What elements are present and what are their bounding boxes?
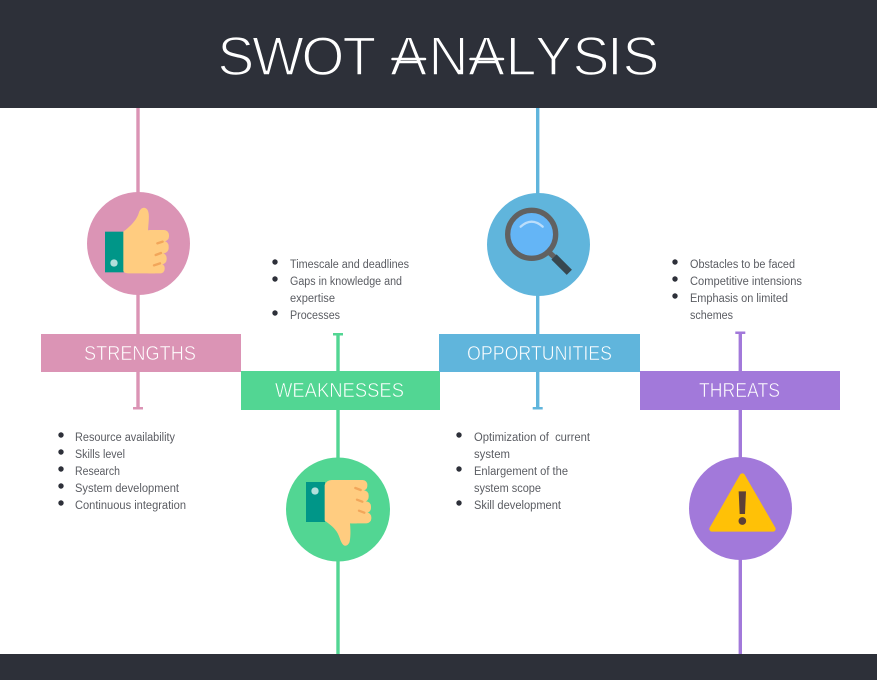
strengths list: Continuous integration — [75, 500, 186, 512]
strengths list: Skills level — [75, 449, 125, 461]
threats list: Obstacles to be faced — [690, 259, 795, 271]
icon: warning triangle — [712, 476, 773, 529]
panel: threats — [640, 259, 840, 654]
strengths list: Resource availability — [75, 432, 175, 444]
strengths heading: STRENGTHS — [84, 343, 196, 365]
threats list: Competitive intensions — [690, 276, 802, 288]
weaknesses icon circle — [286, 458, 390, 562]
weaknesses list: Processes — [290, 310, 340, 322]
opportunities icon circle — [487, 193, 590, 296]
panel: strengths — [41, 108, 241, 512]
opportunities heading bar — [439, 334, 640, 372]
panel: weaknesses — [241, 259, 440, 654]
strengths list: Research — [75, 466, 120, 478]
strengths list — [58, 432, 186, 512]
strengths list: System development — [75, 483, 180, 495]
threats list — [672, 259, 802, 322]
weaknesses timeline stem — [333, 333, 343, 654]
opportunities list: system — [474, 449, 510, 461]
weaknesses heading bar — [241, 371, 440, 410]
threats heading: THREATS — [699, 380, 780, 402]
opportunities list: system scope — [474, 483, 541, 495]
opportunities heading: OPPORTUNITIES — [467, 343, 612, 365]
icon: magnifying glass — [508, 210, 569, 272]
icon: thumbs down — [306, 480, 371, 546]
title: SWOT ANALYSIS — [218, 25, 659, 87]
opportunities list: Optimization of current — [474, 432, 591, 444]
opportunities list — [456, 432, 591, 512]
threats heading bar — [640, 371, 840, 410]
opportunities list: Skill development — [474, 500, 562, 512]
icon: thumbs up — [105, 208, 169, 273]
strengths heading bar — [41, 334, 241, 372]
header band — [0, 0, 877, 108]
threats list: Emphasis on limited — [690, 293, 788, 305]
threats timeline stem — [735, 332, 745, 654]
strengths icon circle — [87, 192, 190, 295]
weaknesses list: Timescale and deadlines — [290, 259, 409, 271]
threats icon circle — [689, 457, 792, 560]
weaknesses list: Gaps in knowledge and — [290, 276, 402, 288]
opportunities list: Enlargement of the — [474, 466, 568, 478]
weaknesses list: expertise — [290, 293, 335, 305]
opportunities timeline stem — [533, 108, 543, 410]
strengths timeline stem — [133, 108, 143, 410]
panel: opportunities — [439, 108, 640, 512]
weaknesses list — [272, 259, 409, 322]
footer band — [0, 654, 877, 680]
weaknesses heading: WEAKNESSES — [275, 380, 404, 402]
threats list: schemes — [690, 310, 733, 322]
